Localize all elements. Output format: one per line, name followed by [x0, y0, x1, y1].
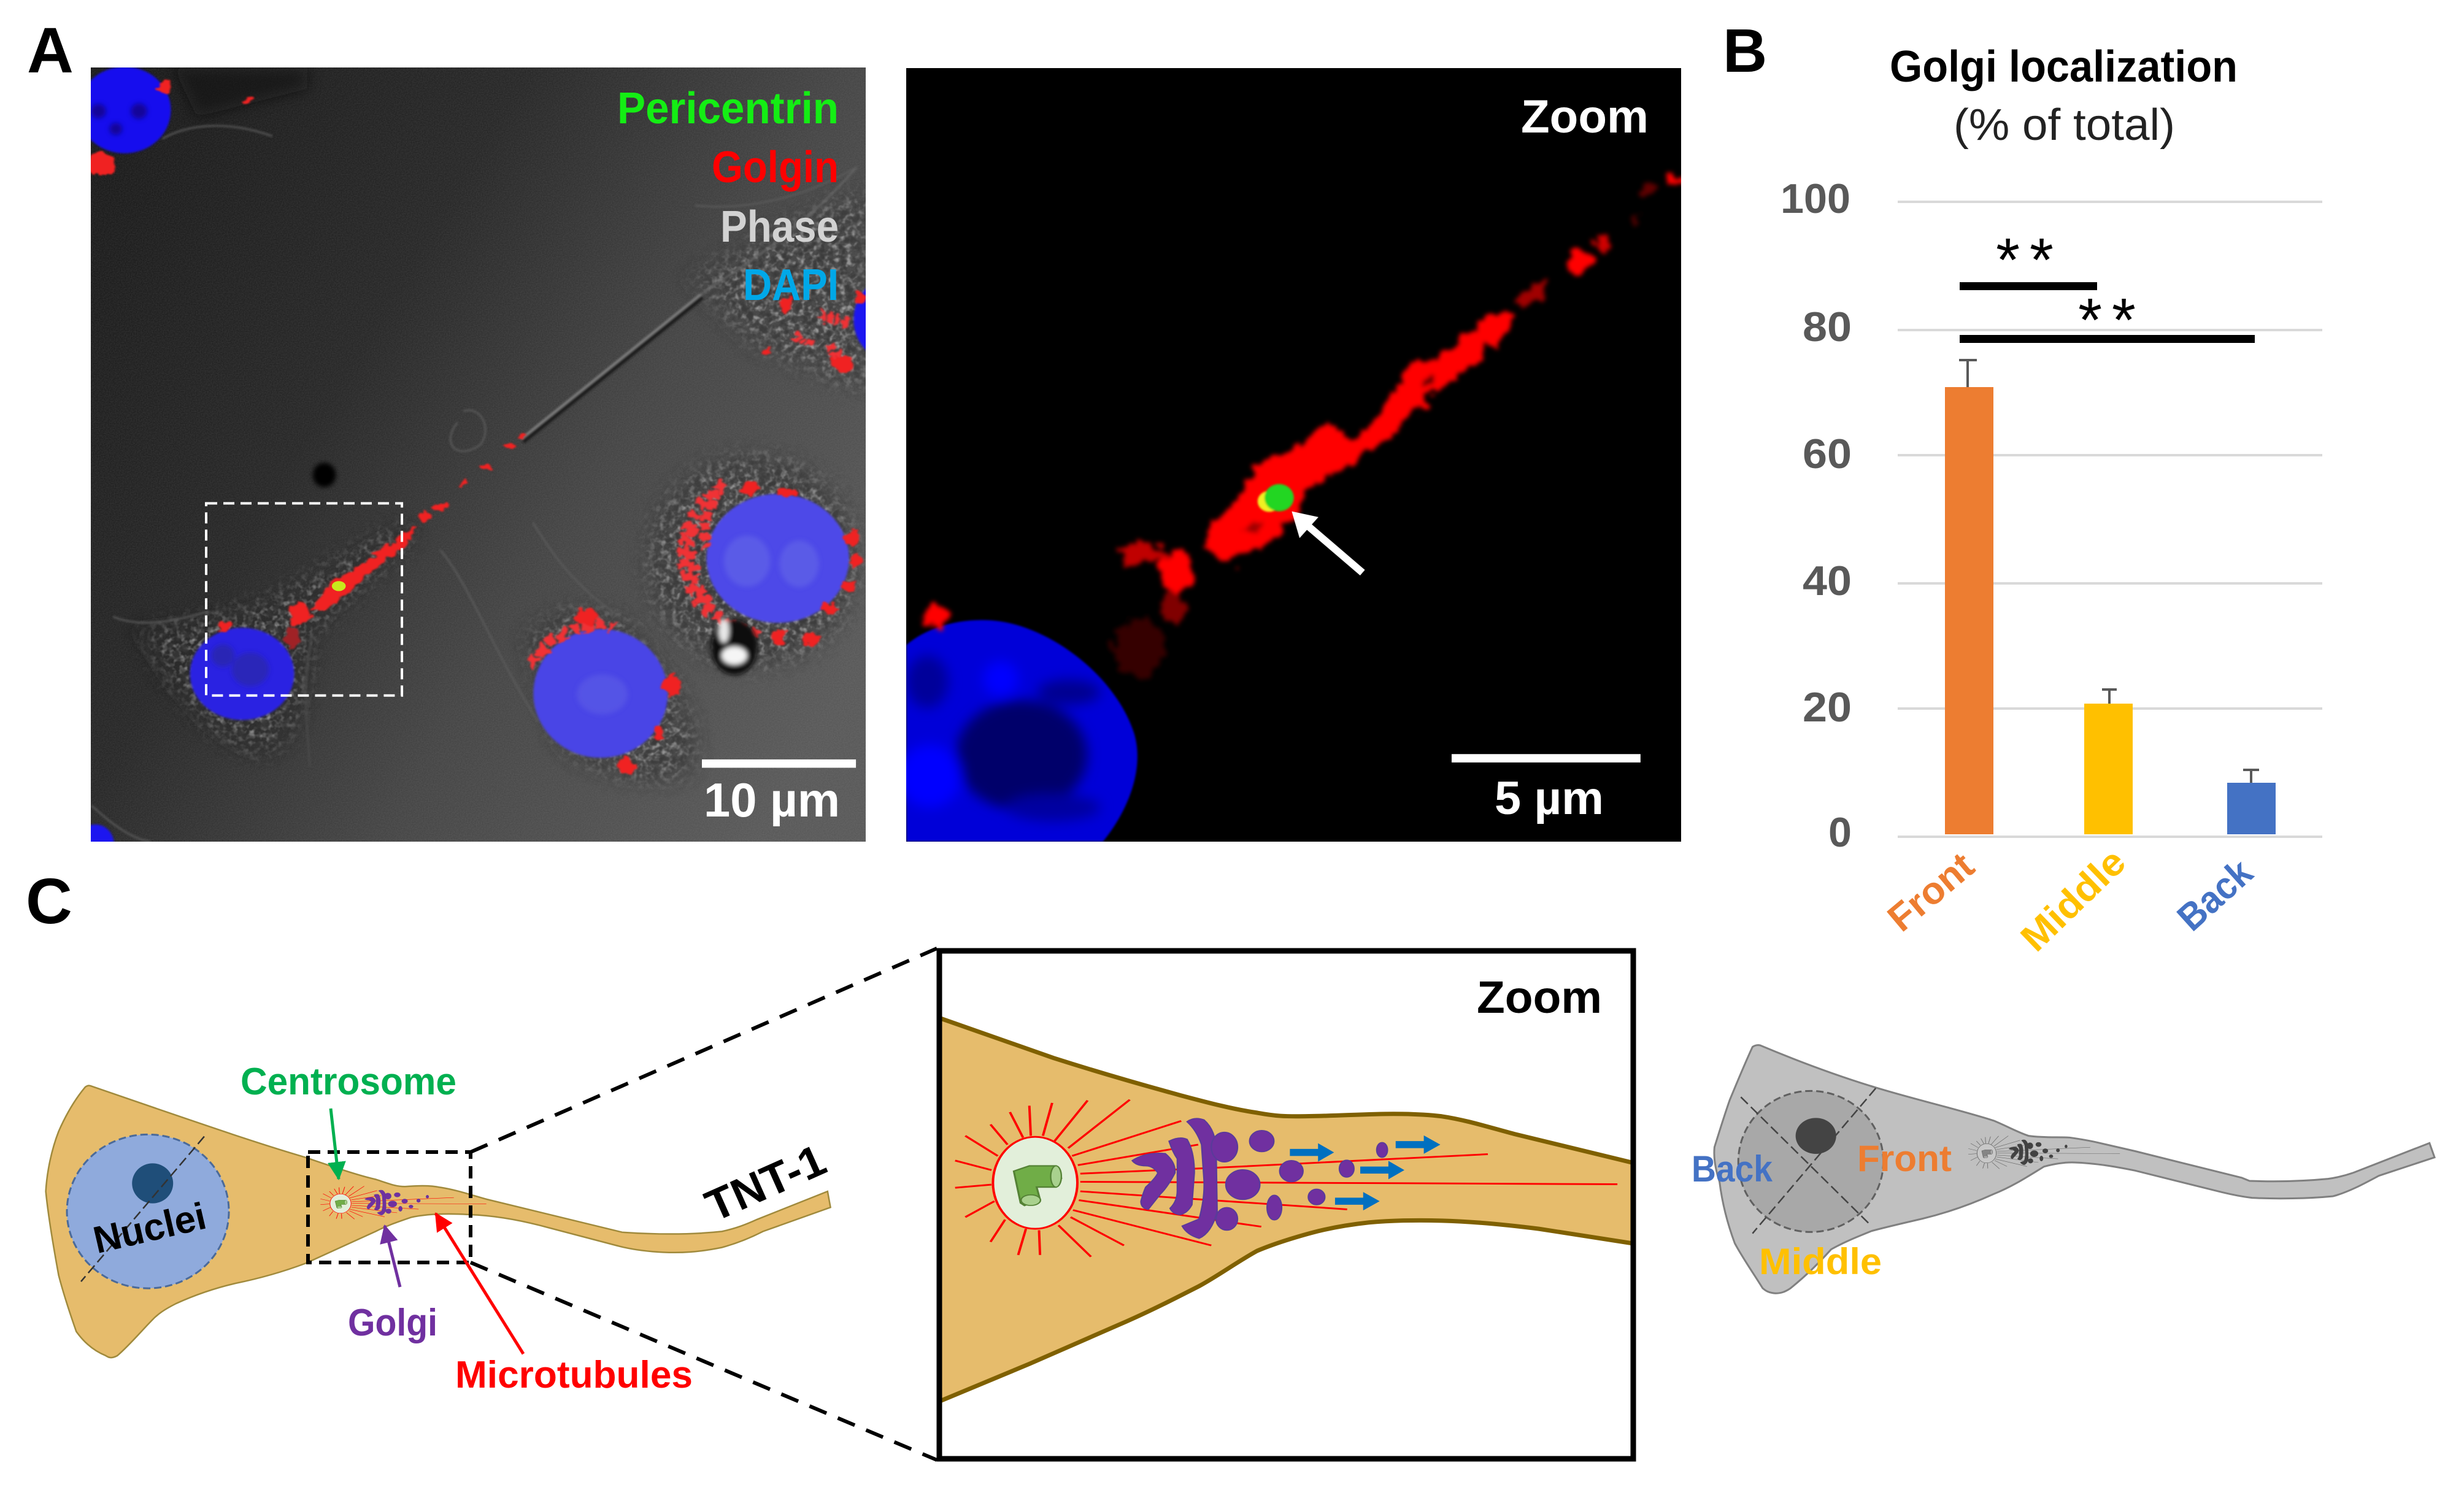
- scale label 5 um: 5 µm: [1495, 772, 1604, 824]
- zoom label: Zoom: [1477, 972, 1602, 1023]
- Pericentrin signal: [1258, 484, 1294, 512]
- scale bar 5 um: [1452, 754, 1641, 763]
- panel label C: C: [26, 866, 72, 937]
- y axis labels: 0: [1828, 809, 1852, 856]
- debris: [711, 618, 758, 675]
- nucleolus: [132, 1163, 173, 1204]
- TNT and cell outlines: [91, 126, 857, 842]
- arrow to Golgi: [385, 1226, 400, 1287]
- grey nucleus: [1738, 1091, 1884, 1232]
- dashed zoom box: [206, 503, 402, 696]
- transport arrows: [1290, 1135, 1441, 1210]
- grey cell body: [1714, 1045, 2435, 1293]
- zone label Back: Back: [1692, 1148, 1773, 1189]
- arrow to microtubules: [436, 1213, 523, 1354]
- scale bar: [702, 759, 856, 768]
- Golgin staining (red): [88, 80, 866, 772]
- scale label 10 um: 10 µm: [704, 773, 840, 827]
- zone label Middle: Middle: [1759, 1241, 1882, 1282]
- chart title: Golgi localization: [1890, 42, 2238, 91]
- significance: Front vs Middle: [1960, 226, 2097, 294]
- white arrow: [1292, 512, 1363, 573]
- channel legend: Golgin: [712, 143, 839, 192]
- y axis labels: 20: [1803, 684, 1852, 731]
- y axis labels: 100: [1781, 175, 1850, 222]
- grey organelles: [1968, 1136, 2120, 1169]
- panel: TNT-1 cell schematic: [46, 948, 937, 1460]
- nucleus: [898, 620, 1138, 842]
- label Nuclei: Nuclei: [90, 1195, 210, 1262]
- panel: bar chart of Golgi localization: [1781, 42, 2322, 959]
- zoom label: Zoom: [1521, 91, 1649, 143]
- panel label B: B: [1723, 17, 1767, 85]
- zoom frame: [939, 951, 1633, 1459]
- panel: zoom micrograph: [898, 68, 1684, 842]
- cell protrusion: [928, 1014, 1646, 1407]
- significance: Front vs Back: [1960, 286, 2255, 355]
- panel: phase-contrast micrograph with fluorescence overlay: [91, 67, 866, 842]
- cell body: [46, 1086, 831, 1358]
- nucleus: [67, 1134, 229, 1288]
- chart subtitle: (% of total): [1954, 101, 2175, 150]
- channel legend: DAPI: [743, 261, 839, 310]
- x axis label Middle: Middle: [2013, 840, 2134, 959]
- cell bodies with granular texture: [133, 67, 866, 782]
- grey nucleolus: [1796, 1118, 1836, 1154]
- Golgin signal: [922, 174, 1684, 678]
- nuclear detail: [91, 103, 819, 715]
- nuclei (DAPI): [91, 67, 866, 842]
- error bars: [1959, 360, 2259, 783]
- significance: Front vs Middle: **: [1996, 226, 2063, 294]
- centrosome signal: [332, 581, 346, 591]
- label Centrosome: Centrosome: [241, 1061, 456, 1103]
- x axis label Front: Front: [1880, 845, 1982, 940]
- significance: Front vs Back: **: [2078, 286, 2146, 355]
- organelles, miniature: [320, 1186, 487, 1219]
- channel legend: [617, 84, 839, 310]
- channel legend: Pericentrin: [617, 84, 839, 133]
- label Microtubules: Microtubules: [455, 1354, 693, 1396]
- x axis label Back: Back: [2169, 851, 2261, 939]
- label Golgi: Golgi: [348, 1302, 437, 1344]
- label TNT-1: TNT-1: [698, 1135, 833, 1231]
- y axis labels: 40: [1803, 558, 1852, 604]
- y axis labels: 60: [1803, 431, 1852, 477]
- arrow to centrosome: [331, 1109, 339, 1179]
- bar: Back: [2227, 783, 2276, 834]
- panel: grey cell schematic with front, middle, back zones: [1692, 1045, 2435, 1293]
- bar: Front: [1945, 387, 1993, 834]
- bar: Middle: [2084, 704, 2133, 834]
- panel: zoomed schematic: [928, 951, 1646, 1459]
- y axis labels: 80: [1803, 304, 1852, 350]
- centrosome, microtubules and Golgi: [955, 1100, 1617, 1257]
- y axis labels: [1781, 175, 1852, 856]
- zone label Front: Front: [1857, 1138, 1952, 1179]
- channel legend: Phase: [720, 202, 839, 252]
- dashed zoom box and guide lines: [308, 948, 937, 1460]
- panel label A: A: [27, 15, 74, 86]
- dark bead artefact: [313, 463, 336, 487]
